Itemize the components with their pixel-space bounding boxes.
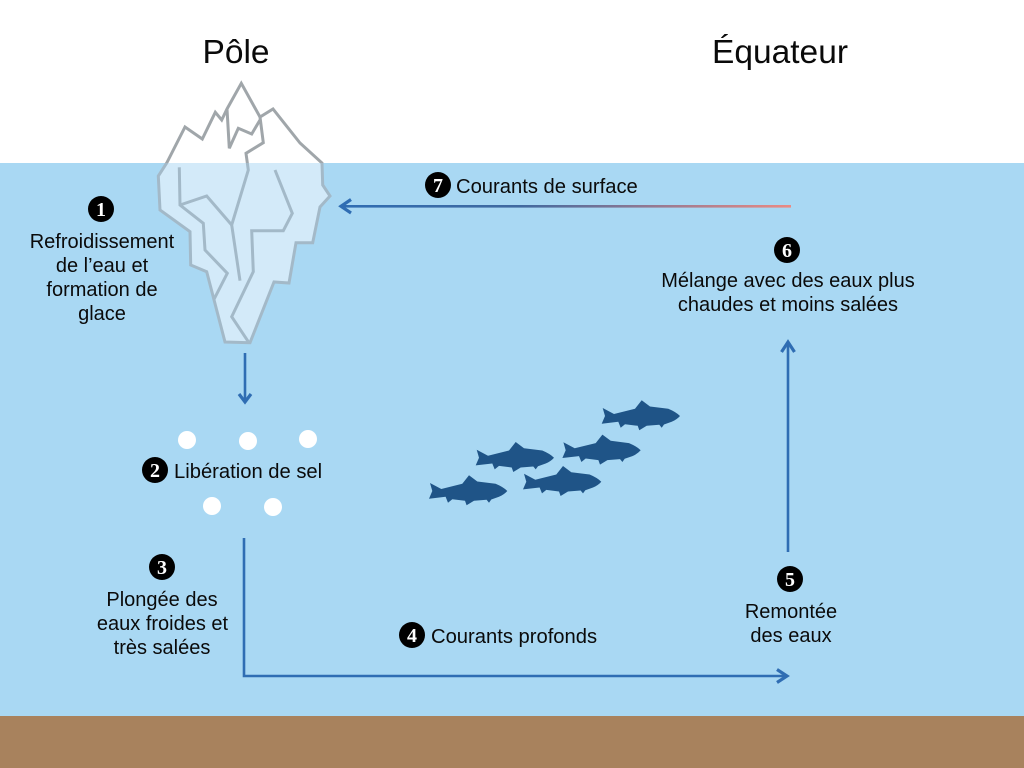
salt particles bbox=[178, 430, 317, 516]
arrow: surface current bbox=[341, 200, 791, 213]
step 5: upwelling label bbox=[745, 566, 837, 647]
step 1: cooling label: Refroidissement bbox=[30, 231, 175, 253]
step 6: mixing label: chaudes et moins salées bbox=[678, 294, 898, 316]
step 4: deep current label: Courants profonds bbox=[431, 626, 597, 648]
step 6: mixing label bbox=[661, 237, 915, 316]
icon: iceberg bbox=[158, 83, 330, 343]
step 6: mixing label: Mélange avec des eaux plus bbox=[661, 270, 915, 292]
icon: school of fish bbox=[429, 400, 680, 505]
step 7: surface current label: 7 bbox=[433, 175, 443, 197]
step 5: upwelling label: des eaux bbox=[750, 625, 832, 647]
arrow: upwelling bbox=[782, 342, 794, 552]
step 5: upwelling label: Remontée bbox=[745, 601, 837, 623]
step 4: deep current label: 4 bbox=[407, 625, 417, 647]
arrow: deep current bbox=[244, 538, 787, 682]
water background bbox=[0, 163, 1024, 716]
step 2: salt release label: 2 bbox=[150, 460, 160, 482]
step 2: salt release label bbox=[142, 457, 322, 483]
step 7: surface current label: Courants de surface bbox=[456, 176, 638, 198]
step 3: plunge label: eaux froides et bbox=[97, 613, 229, 635]
heading: Équateur: Équateur bbox=[712, 34, 848, 71]
step 3: plunge label bbox=[97, 554, 229, 659]
step 3: plunge label: très salées bbox=[114, 637, 210, 659]
step 1: cooling label: glace bbox=[78, 303, 126, 325]
arrow: iceberg to salt bbox=[239, 353, 251, 402]
step 3: plunge label: Plongée des bbox=[106, 589, 218, 611]
step 1: cooling label: de l’eau et bbox=[56, 255, 149, 277]
step 3: plunge label: 3 bbox=[157, 557, 167, 579]
step 6: mixing label: 6 bbox=[782, 240, 792, 262]
step 1: cooling label bbox=[30, 196, 175, 325]
step 1: cooling label: formation de bbox=[46, 279, 158, 301]
step 5: upwelling label: 5 bbox=[785, 569, 795, 591]
step 1: cooling label: 1 bbox=[96, 199, 106, 221]
seabed bbox=[0, 716, 1024, 768]
step 2: salt release label: Libération de sel bbox=[174, 461, 322, 483]
heading: Pôle: Pôle bbox=[202, 34, 270, 71]
